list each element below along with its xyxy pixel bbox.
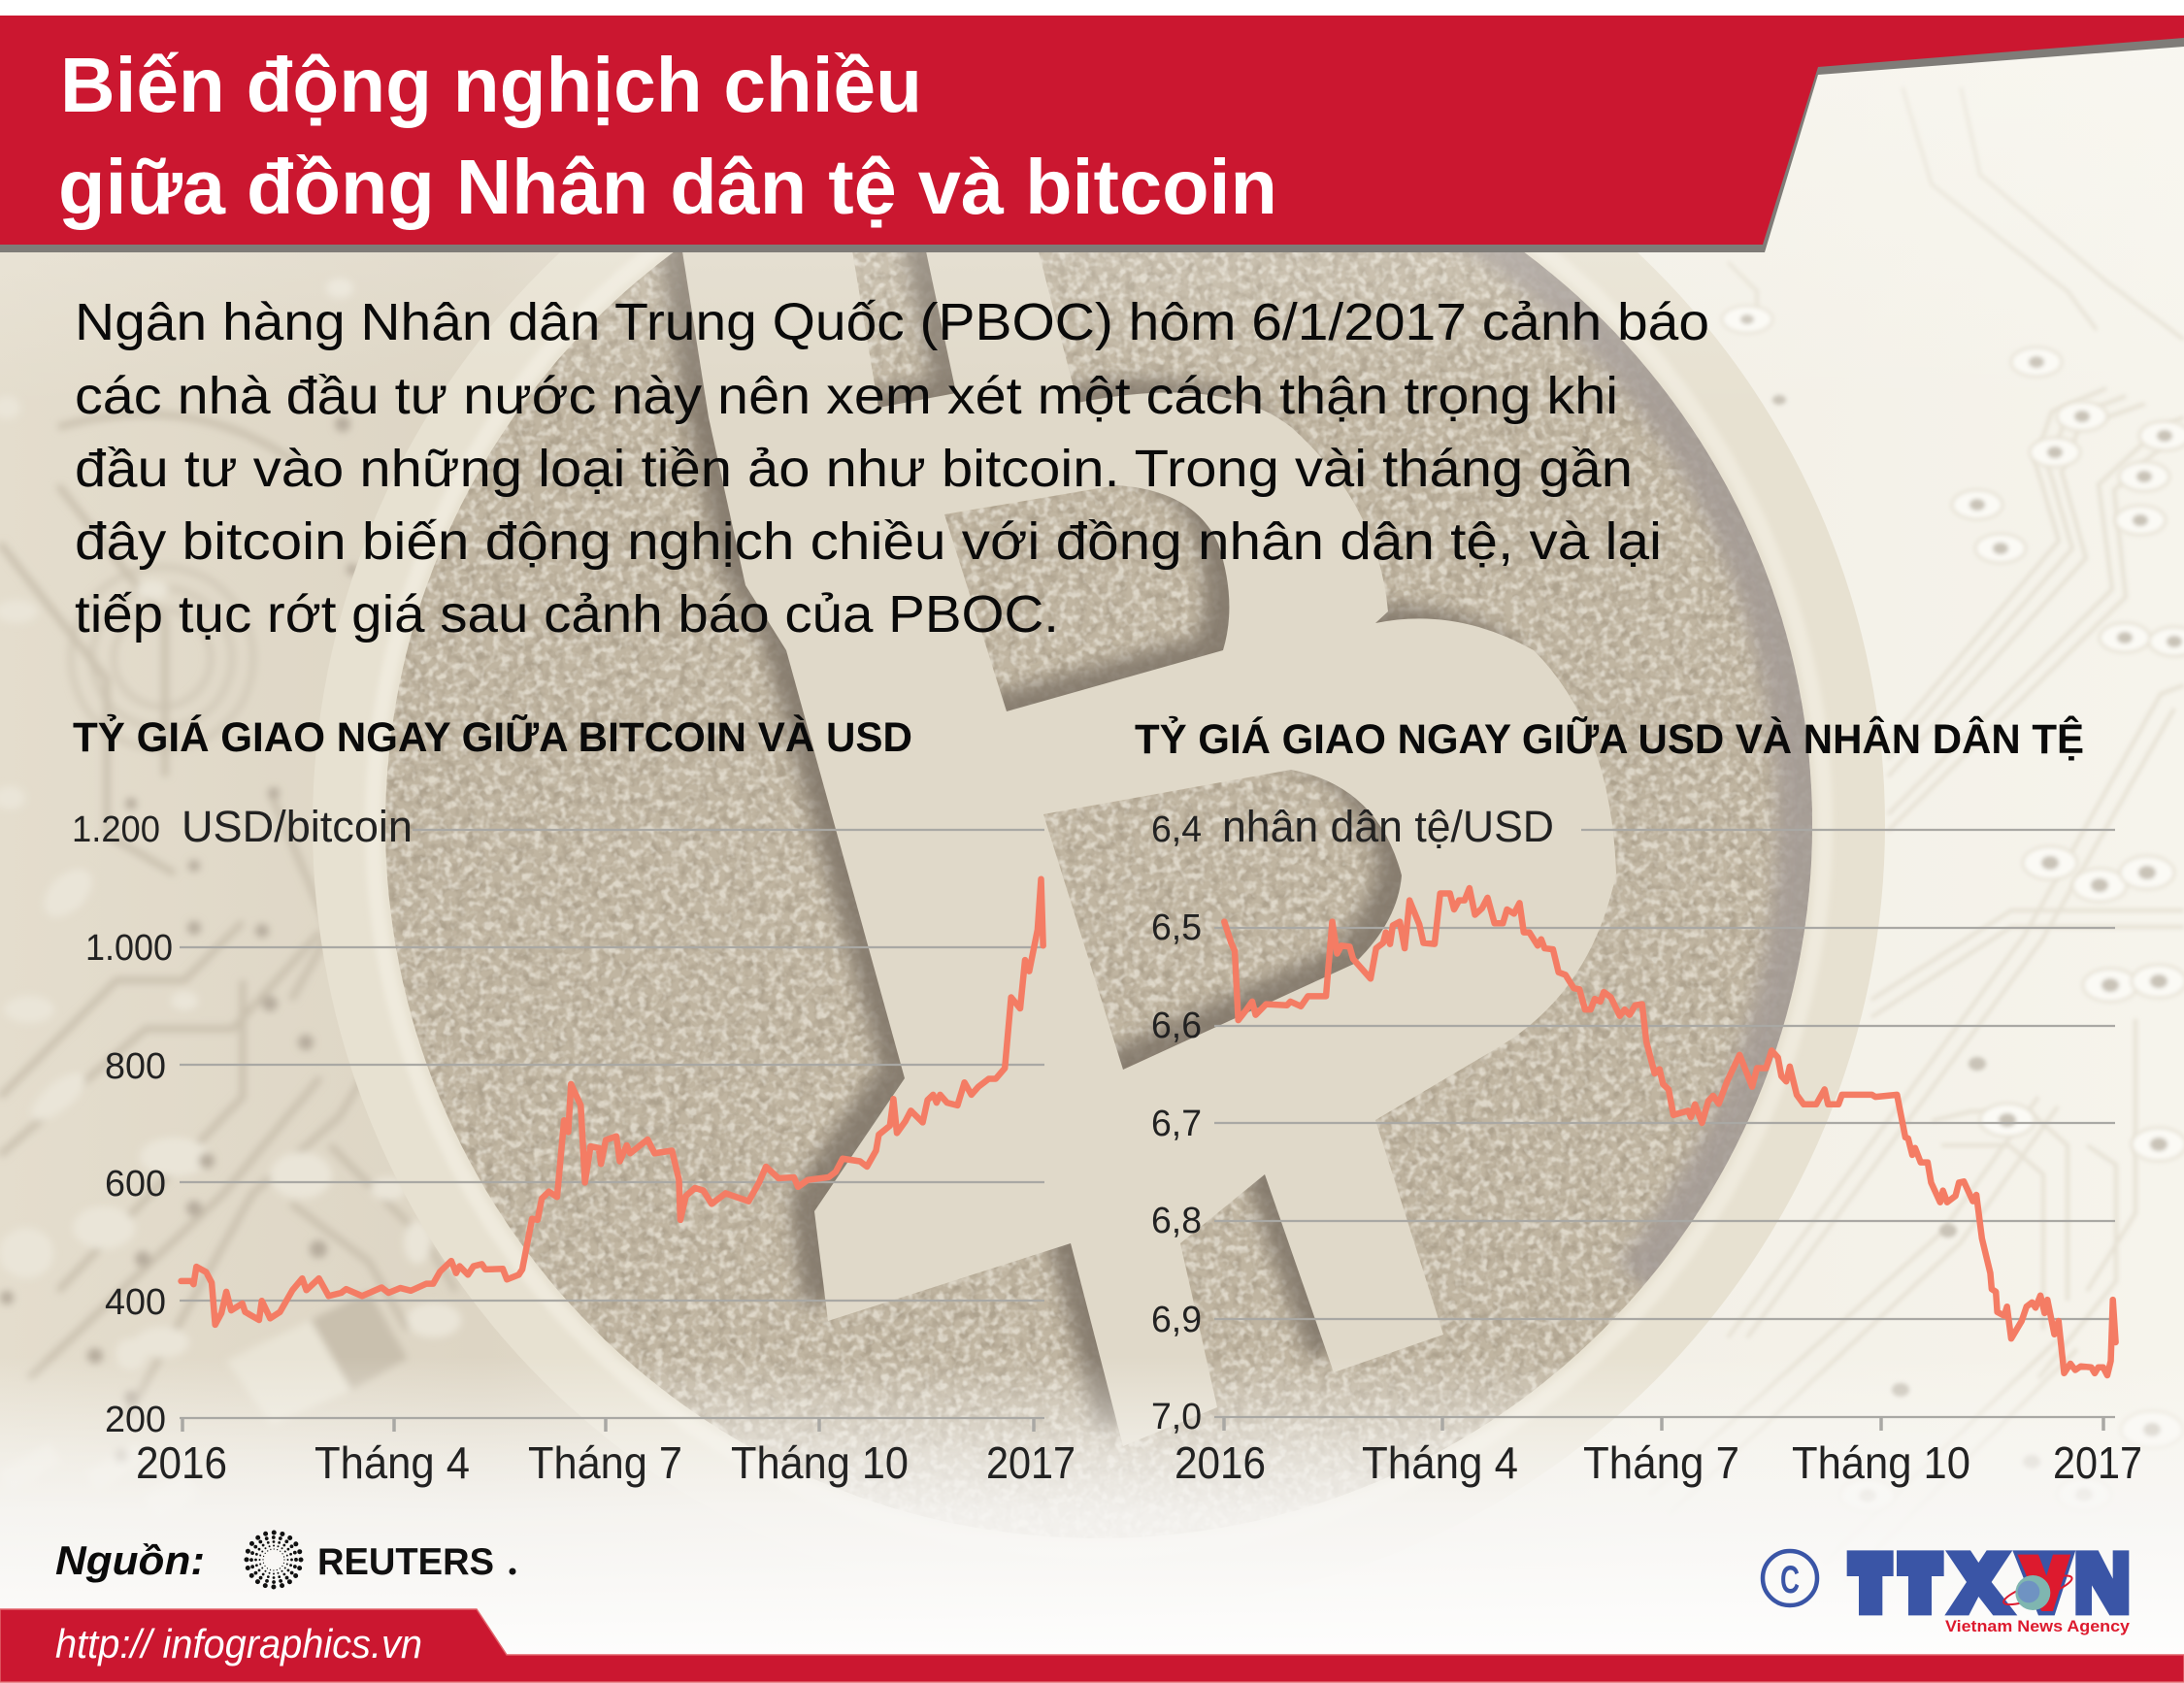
circuit traces right bbox=[1650, 87, 2184, 1582]
title bbox=[58, 42, 1277, 230]
x axis labels left: Tháng 7 bbox=[528, 1437, 682, 1488]
x axis labels left: Tháng 4 bbox=[314, 1437, 470, 1488]
fade overlays bbox=[0, 1339, 2184, 1683]
chart heading left: TỶ GIÁ GIAO NGAY GIỮA BITCOIN VÀ USD bbox=[73, 713, 912, 761]
intro text block: đây bitcoin biến động nghịch chiều với đồng nhân dân tệ, và lại bbox=[75, 512, 1662, 571]
title: Biến động nghịch chiều bbox=[60, 42, 922, 128]
source: Reuters bbox=[55, 1533, 516, 1587]
line: bitcoin price bbox=[182, 879, 1043, 1325]
icon: copyright: C bbox=[1780, 1559, 1800, 1601]
intro text block: các nhà đầu tư nước này nên xem xét một cách thận trọng khi bbox=[75, 367, 1618, 425]
icon: Reuters dot ring bbox=[247, 1533, 301, 1587]
y axis labels right: 6,7 bbox=[1151, 1104, 1202, 1144]
Reuters dot bbox=[509, 1568, 516, 1574]
x axis labels right: Tháng 7 bbox=[1583, 1437, 1739, 1488]
x axis labels left: 2017 bbox=[986, 1437, 1075, 1488]
chart: bitcoin vs USD bbox=[72, 713, 1075, 1488]
x axis labels right bbox=[1175, 1437, 2142, 1488]
coin rim bbox=[313, 39, 1885, 1611]
bitcoin symbol bbox=[679, 233, 1616, 1446]
website url: http:// infographics.vn bbox=[55, 1621, 422, 1666]
intro text block: đầu tư vào những loại tiền ảo như bitcoin. Trong vài tháng gần bbox=[75, 440, 1633, 498]
icon: copyright bbox=[1763, 1551, 1817, 1605]
coin inner textured disc bbox=[385, 252, 1812, 1510]
intro text block: Ngân hàng Nhân dân Trung Quốc (PBOC) hôm 6/1/2017 cảnh báo bbox=[75, 293, 1709, 351]
y axis labels right: 6,5 bbox=[1151, 908, 1202, 948]
title: giữa đồng Nhân dân tệ và bitcoin bbox=[58, 144, 1277, 230]
y axis labels left bbox=[72, 802, 413, 1440]
circuit traces left bbox=[0, 279, 461, 1520]
footer bar bbox=[0, 1609, 2184, 1682]
x axis labels left: 2016 bbox=[136, 1437, 227, 1488]
y axis labels left: 1.200 bbox=[72, 809, 160, 850]
y axis labels right: 6,6 bbox=[1151, 1006, 1202, 1046]
bitcoin symbol shadow bbox=[654, 219, 1591, 1433]
y axis labels right: nhân dân tệ/USD bbox=[1222, 802, 1554, 851]
y axis labels right: 7,0 bbox=[1151, 1397, 1202, 1437]
y axis labels left: 200 bbox=[105, 1400, 166, 1440]
x axis labels right: Tháng 4 bbox=[1362, 1437, 1518, 1488]
y axis labels right: 6,4 bbox=[1151, 809, 1202, 850]
source label: Nguồn: bbox=[55, 1537, 205, 1583]
y axis labels right: 6,9 bbox=[1151, 1300, 1202, 1340]
Reuters wordmark: REUTERS bbox=[317, 1541, 494, 1583]
header banner bbox=[0, 16, 2184, 252]
intro text block bbox=[75, 293, 1709, 644]
y axis labels left: 400 bbox=[105, 1282, 166, 1323]
y axis labels left: 1.000 bbox=[85, 928, 173, 969]
y axis labels left: 600 bbox=[105, 1164, 166, 1204]
coin inner edge shadow bbox=[1444, 204, 1804, 1281]
x axis labels right: Tháng 10 bbox=[1792, 1437, 1970, 1488]
y axis labels right: 6,8 bbox=[1151, 1201, 1202, 1241]
x axis labels left: Tháng 10 bbox=[731, 1437, 909, 1488]
chart heading right: TỶ GIÁ GIAO NGAY GIỮA USD VÀ NHÂN DÂN TỆ bbox=[1135, 715, 2084, 763]
x axis labels right: 2016 bbox=[1175, 1437, 1266, 1488]
agency tagline: Vietnam News Agency bbox=[1945, 1617, 2131, 1635]
grid lines left bbox=[180, 830, 1044, 1432]
x axis labels left bbox=[136, 1437, 1075, 1488]
logo: TTXVN bbox=[1763, 1550, 2131, 1635]
TTXVN letters bbox=[1847, 1550, 2129, 1615]
y axis labels left: USD/bitcoin bbox=[182, 802, 413, 851]
chart: USD vs CNY bbox=[1135, 715, 2142, 1488]
intro text block: tiếp tục rớt giá sau cảnh báo của PBOC. bbox=[75, 585, 1059, 644]
y axis labels left: 800 bbox=[105, 1046, 166, 1087]
grid lines right bbox=[1214, 830, 2115, 1431]
x axis labels right: 2017 bbox=[2053, 1437, 2142, 1488]
line: USD/CNY rate bbox=[1224, 888, 2116, 1375]
y axis labels right bbox=[1151, 802, 1554, 1437]
